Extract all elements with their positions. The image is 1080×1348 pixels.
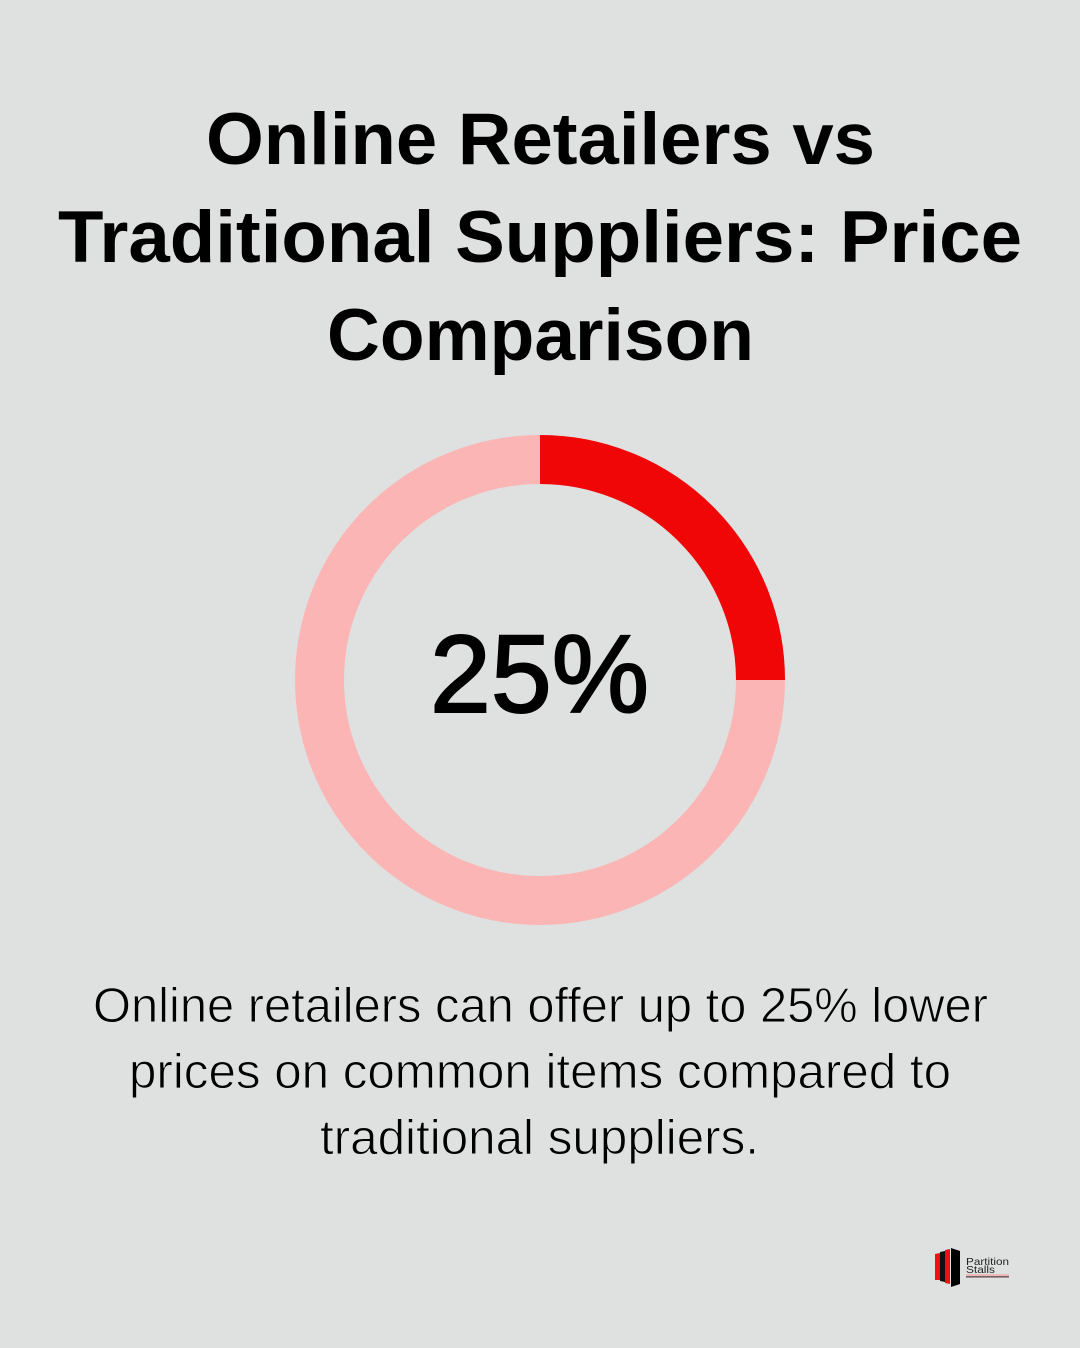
- logo tagline strip: [966, 1274, 1009, 1278]
- title: [58, 99, 1022, 376]
- logo wordmark: Stalls: [966, 1264, 995, 1276]
- icon: partition panels: [935, 1248, 960, 1287]
- donut chart: 25%: [320, 460, 760, 900]
- title: Traditional Suppliers: Price: [58, 197, 1022, 278]
- title: Online Retailers vs: [206, 99, 875, 180]
- logo wordmark: Partition: [966, 1256, 1009, 1268]
- description: prices on common items compared to: [129, 1045, 951, 1099]
- description: Online retailers can offer up to 25% lower: [93, 979, 988, 1033]
- description: traditional suppliers.: [320, 1111, 759, 1165]
- logo: Partition Stalls: [935, 1248, 1009, 1287]
- description: [93, 979, 988, 1165]
- title: Comparison: [327, 295, 754, 376]
- logo wordmark: [966, 1256, 1009, 1276]
- donut value: 25%: [430, 613, 649, 736]
